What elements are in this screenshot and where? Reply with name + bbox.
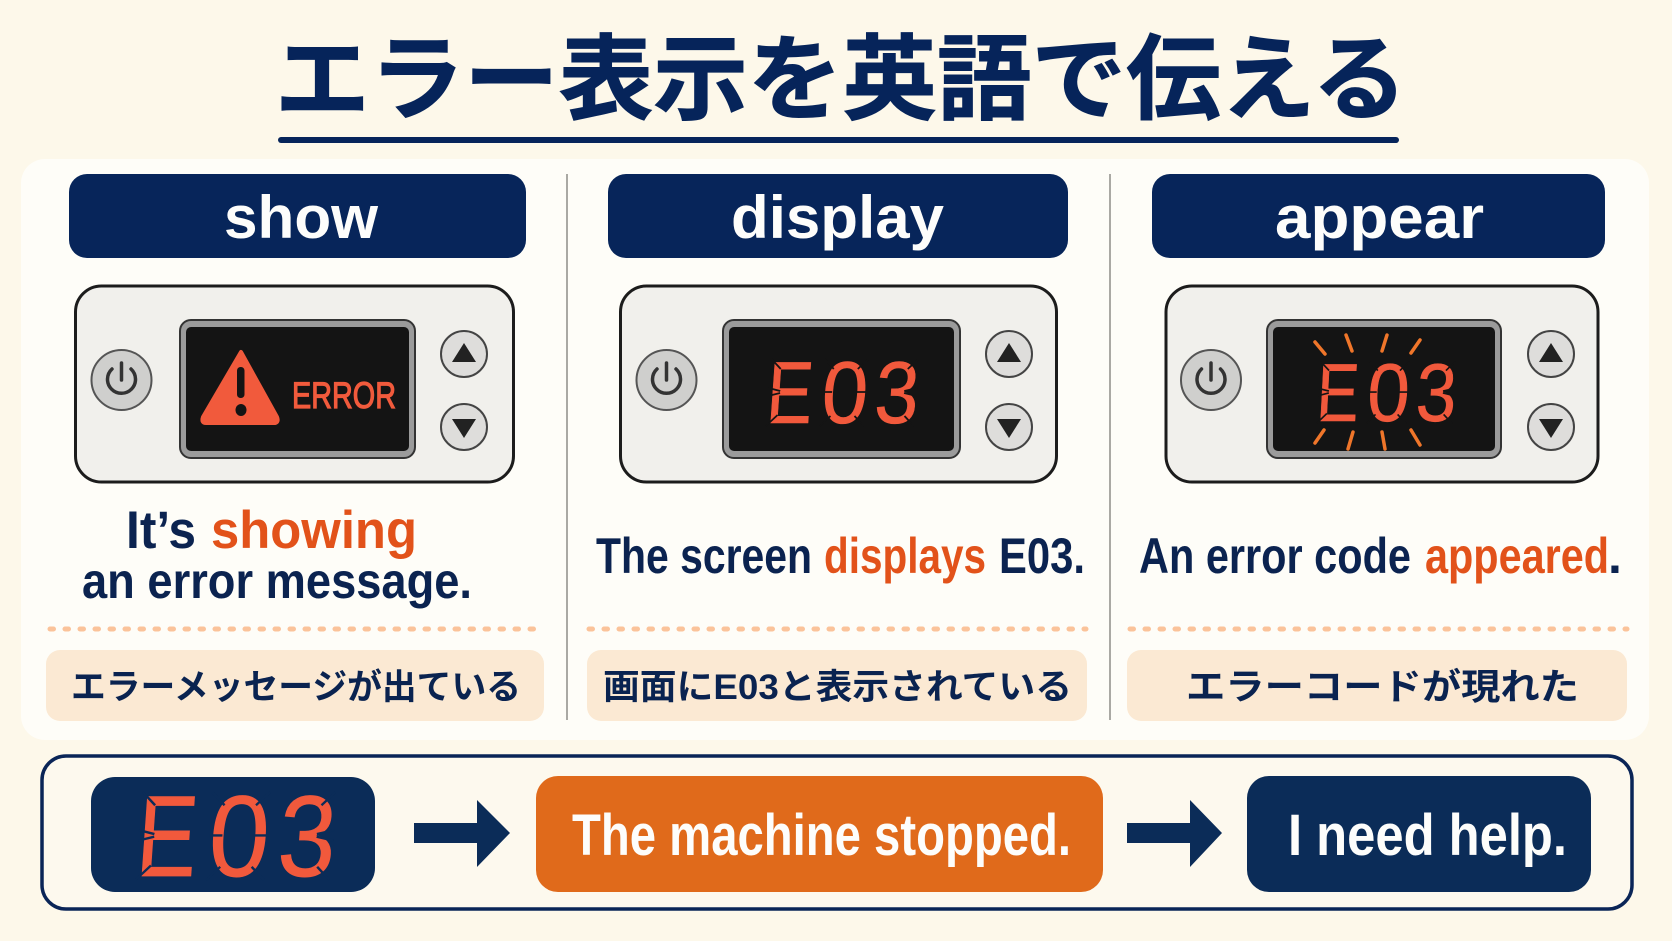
device: E03 screen [620,286,1056,482]
sentence: display: displays [824,528,986,584]
code: E03: 0 [1365,348,1412,439]
japanese translation: display [587,650,1087,721]
heading: show: show [224,184,378,251]
japanese translation: appear: エラーコードが現れた [1186,666,1579,707]
flow step: need help [1247,776,1591,892]
flow step: machine stopped: The machine stopped. [572,803,1071,868]
sentence: display: The screen [596,528,812,584]
heading: appear [1152,174,1605,258]
device: flashing E03 screen [1166,286,1598,482]
device: warning and ERROR screen [76,286,514,482]
arrow [1127,800,1222,867]
code: E03: E [764,343,817,442]
flow step: E03 code: E [133,773,202,901]
arrow [414,800,510,867]
icon: flash rays [1315,335,1420,449]
flow step: E03 code: 3 [274,773,341,901]
column: appear [1127,174,1627,721]
japanese translation: appear [1127,650,1627,721]
sentence: appear [1139,528,1622,584]
icon: warning triangle [202,352,278,423]
sentence: display: E03. [999,528,1085,584]
heading: appear: appear [1275,184,1484,251]
column: show [46,174,544,721]
heading: display [608,174,1068,258]
sentence: show [82,501,472,609]
code: E03: E [1314,348,1362,439]
code: E03: 3 [1414,348,1459,439]
column: display [587,174,1087,721]
sentence: display [596,528,1085,584]
code: E03 [1314,348,1459,439]
panel: three verbs [21,159,1649,740]
flow step: E03 code [91,773,375,901]
code: E03: 0 [819,343,872,442]
sentence: show: an error message. [82,553,472,609]
code: E03: 3 [872,343,923,442]
heading: show [69,174,526,258]
sentence: appear: An error code [1139,528,1411,584]
flow step: machine stopped [536,776,1103,892]
sentence: appear: . [1608,528,1622,584]
japanese translation: display: 画面にE03と表示されている [603,668,1072,707]
sentence: appear: appeared [1425,528,1609,584]
flow step: need help: I need help. [1288,803,1567,868]
heading: display: display [731,184,945,251]
flow step: E03 code: 0 [205,773,274,901]
code: E03 [764,343,923,442]
sentence: show: It’s [126,501,196,560]
japanese translation: show: エラーメッセージが出ている [71,668,521,707]
japanese translation: show [46,650,544,721]
sentence: show: showing [211,501,417,560]
panel: flow strip [42,756,1632,909]
title: エラー表示を英語で伝える [275,28,1407,132]
label: ERROR: ERROR [292,375,396,416]
